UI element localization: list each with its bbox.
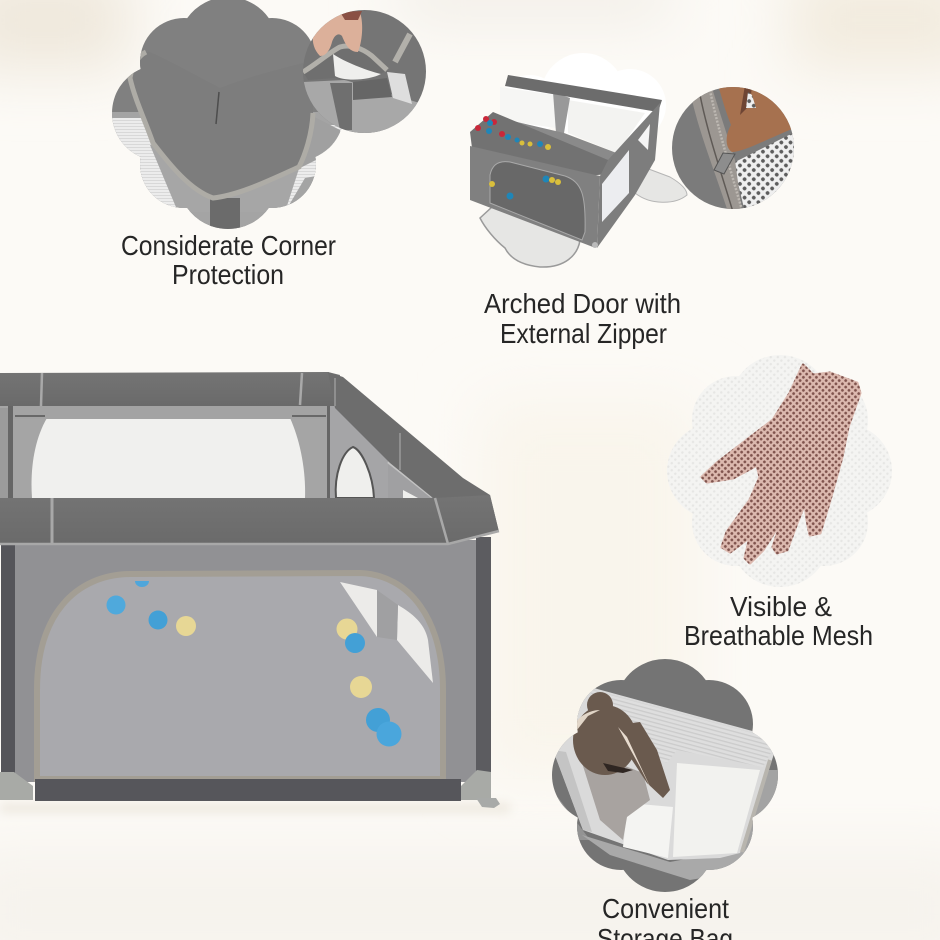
icon: scalloped storage photo — [545, 655, 785, 895]
corner pad — [130, 52, 313, 198]
right post — [476, 537, 491, 772]
text: storage caption — [597, 893, 733, 940]
icon: miniature playpen — [470, 75, 687, 267]
panel: storage bag — [545, 655, 785, 940]
text: mesh caption: Visible & — [730, 591, 832, 622]
ledge — [495, 115, 635, 165]
playpen — [0, 372, 500, 808]
icon: hand behind mesh — [702, 365, 860, 563]
back window — [32, 418, 305, 498]
corner feet — [0, 772, 33, 800]
text: mesh caption — [684, 591, 873, 651]
arched mesh door — [37, 573, 443, 779]
window reveal — [340, 582, 377, 637]
pad trim — [130, 52, 313, 198]
feet — [592, 242, 598, 248]
right side — [597, 103, 660, 248]
back ledge — [13, 406, 328, 419]
icon: scalloped mesh background — [667, 355, 892, 587]
bottom rail — [35, 779, 461, 801]
text: door caption: External Zipper — [500, 318, 667, 349]
text: mesh caption: Breathable Mesh — [684, 620, 873, 651]
panel: mesh — [667, 355, 892, 651]
balls — [106, 581, 402, 746]
right rail — [328, 372, 499, 532]
front top rail — [0, 495, 499, 545]
rail with balls — [470, 112, 608, 176]
text: door caption: Arched Door with — [484, 288, 681, 319]
front panel — [470, 146, 600, 247]
flap — [344, 80, 346, 81]
side wall — [328, 406, 434, 498]
left post — [1, 540, 15, 775]
icon: zipper detail circle — [670, 85, 796, 212]
back windows — [500, 87, 556, 128]
panel: corner protection — [105, 0, 430, 290]
front panel — [14, 540, 476, 782]
back wall — [0, 405, 332, 500]
icon: corner detail circle — [300, 8, 430, 136]
balls — [483, 116, 489, 122]
text: corner caption: Considerate Corner — [121, 230, 336, 261]
text: corner caption: Protection — [172, 259, 284, 290]
back rail — [0, 372, 340, 406]
side window — [336, 447, 374, 498]
text: corner caption — [121, 230, 336, 290]
back rail — [505, 75, 662, 112]
icon: scalloped white backing — [500, 53, 666, 141]
bag body — [553, 687, 778, 860]
icon: plush bunny — [573, 692, 670, 798]
diapers — [673, 763, 760, 857]
icon: scalloped corner photo — [105, 0, 350, 237]
text: storage caption: Convenient — [602, 893, 729, 924]
text: door caption — [484, 288, 681, 349]
mesh pocket — [582, 765, 650, 840]
flaps — [480, 207, 580, 267]
panel: arched door — [470, 53, 796, 349]
arched door — [490, 162, 585, 240]
fingers — [313, 12, 362, 56]
